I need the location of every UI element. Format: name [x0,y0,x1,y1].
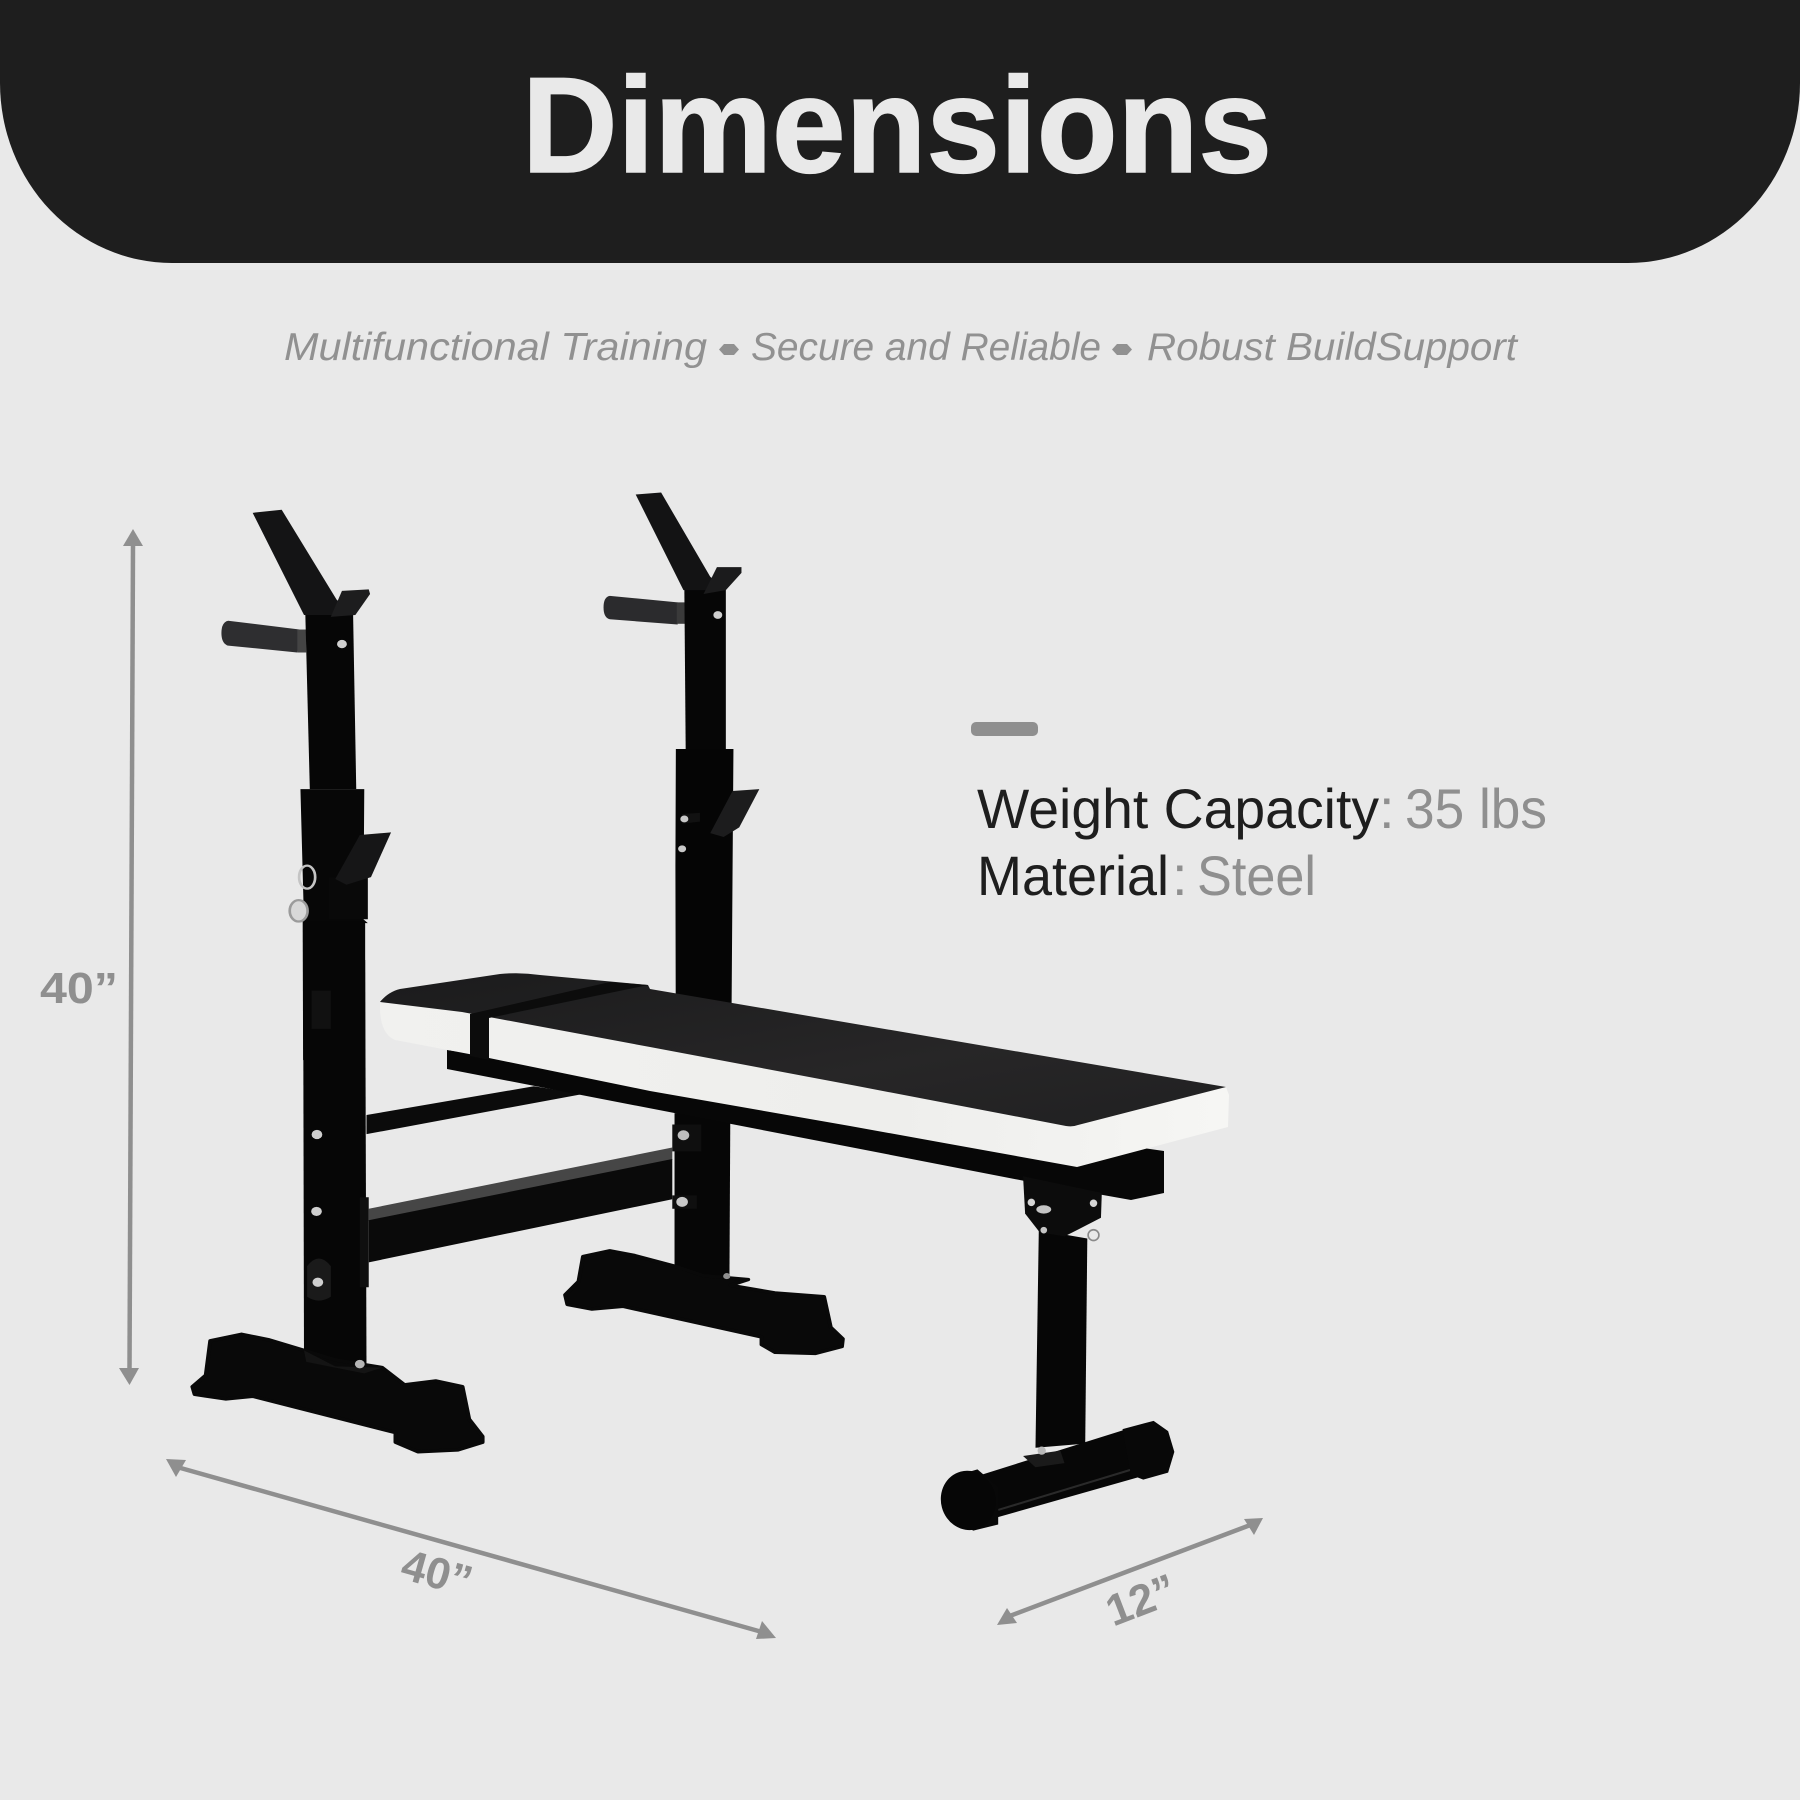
strap [470,982,648,1060]
arrow: height dimension [119,529,143,1385]
title: Dimensions [522,49,1272,201]
subtitle feature line: Secure and Reliable [751,326,1101,369]
weight bench illustration [192,493,1229,1536]
specs text block: Weight Capacity [977,777,1379,840]
front upright [221,510,391,1060]
subtitle feature line [284,326,1519,369]
subtitle feature line: Robust BuildSupport [1147,326,1519,369]
specs text block: : [1172,844,1188,907]
accent bar [971,722,1038,736]
arrow: length dimension [166,1459,776,1639]
specs text block: 35 lbs [1405,777,1547,840]
header banner [0,0,1800,263]
front folding leg [934,1176,1174,1536]
specs text block: : [1379,777,1395,840]
specs text block: Material [977,844,1169,907]
seat support frame [447,1050,1164,1200]
label: height 40 inches: 40” [40,964,118,1013]
rear upright [604,493,759,1060]
specs text block: Steel [1197,844,1316,907]
seat cushion [380,973,1229,1167]
label: length 40 inches: 40” [396,1540,478,1607]
arrow: width dimension [997,1518,1263,1625]
front upright base and front foot [192,960,483,1452]
specs text block [977,777,1547,907]
crossbars and rear foot [367,1086,843,1353]
subtitle feature line: Multifunctional Training [284,326,707,369]
label: width 12 inches: 12” [1099,1565,1183,1636]
